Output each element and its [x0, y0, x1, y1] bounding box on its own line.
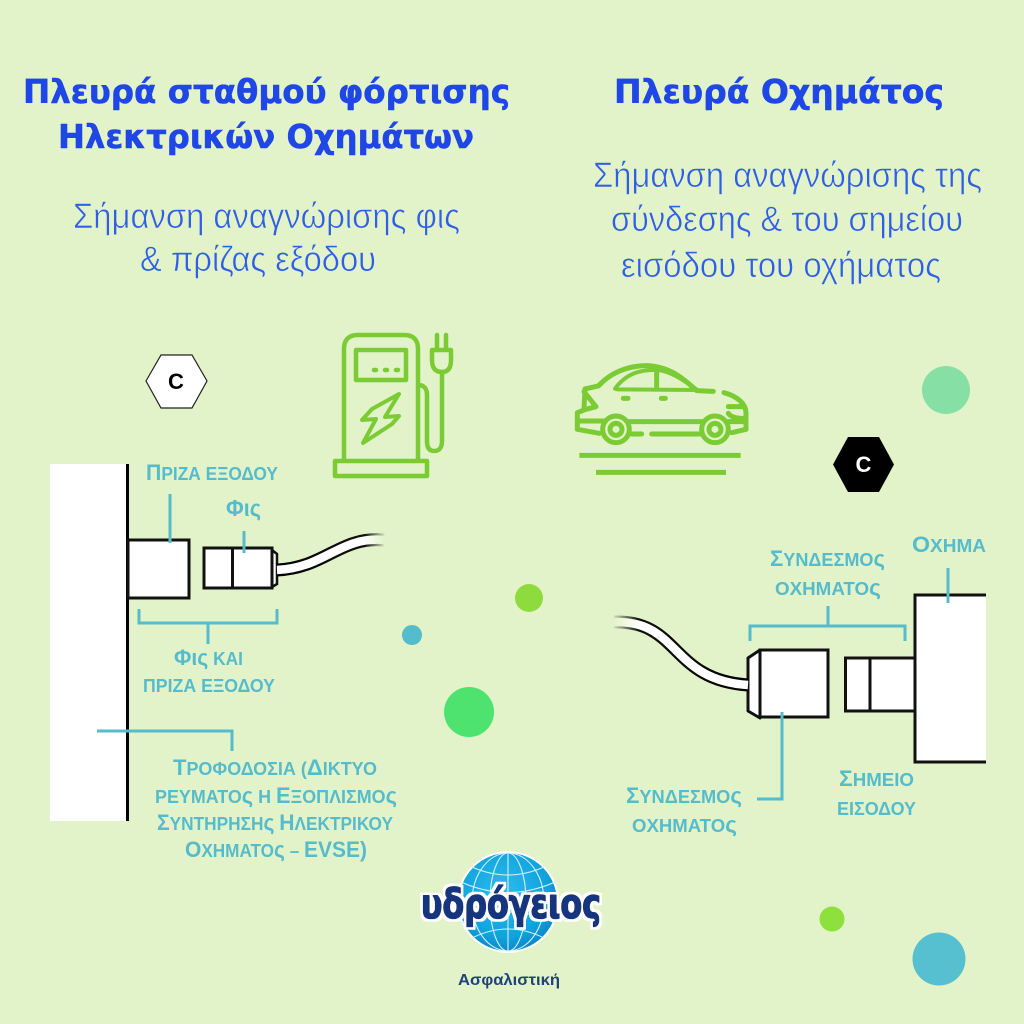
vehicle connector	[748, 650, 828, 718]
label: plug and outlet	[143, 645, 275, 696]
vehicle inlet	[846, 658, 915, 711]
socket outlet	[128, 540, 189, 598]
panel: vehicle diagram	[614, 532, 986, 837]
label: vehicle connector bottom	[626, 783, 742, 837]
label: power supply: ΡΕΥΜΑΤΟς Η ΕΞΟΠΛΙΣΜΟς	[155, 783, 397, 808]
icon: black hexagon C	[833, 437, 894, 492]
vehicle body	[915, 595, 986, 762]
icon: car	[577, 366, 746, 472]
cable	[614, 622, 748, 685]
label: power supply: ΤΡΟΦΟΔΟΣΙΑ (ΔΙΚΤΥΟ	[173, 755, 377, 780]
panel: charging station diagram	[50, 460, 397, 862]
heading: charging station side: Πλευρά σταθμού φόρτισης	[23, 72, 510, 111]
heading: vehicle side: Πλευρά Οχημάτος	[614, 72, 944, 111]
icon: charging station	[335, 335, 451, 476]
subheading: connector and vehicle inlet marking	[593, 156, 982, 285]
icon: white hexagon C: C	[168, 369, 184, 394]
globe	[458, 852, 558, 952]
label: plug and outlet: Φις ΚΑΙ	[174, 645, 243, 670]
plug	[204, 548, 277, 588]
heading: charging station side: Ηλεκτρικών Οχημάτων	[58, 117, 474, 156]
logo: Ydrogeios Insurance	[421, 852, 601, 989]
subheading: connector and vehicle inlet marking: σύνδεσης & του σημείου	[611, 200, 963, 239]
cable	[277, 540, 384, 570]
wordmark: υδρόγειος	[421, 880, 601, 928]
label: entry point: ΣΗΜΕΙΟ	[839, 766, 914, 791]
label: entry point: ΕΙΣΟΔΟΥ	[837, 799, 916, 819]
label: power supply: ΣΥΝΤΗΡΗΣΗς ΗΛΕΚΤΡΙΚΟΥ	[157, 810, 393, 835]
subheading: plug and outlet marking	[73, 197, 460, 279]
label: vehicle connector top	[770, 546, 885, 600]
label: vehicle connector top: ΣΥΝΔΕΣΜΟς	[770, 546, 885, 571]
label: vehicle connector bottom: ΟΧΗΜΑΤΟς	[632, 812, 737, 837]
subheading: connector and vehicle inlet marking: εισόδου του οχήματος	[621, 246, 941, 285]
icon: white hexagon C	[146, 355, 207, 408]
supply equipment wall	[50, 464, 129, 821]
icon: black hexagon C: C	[856, 452, 872, 477]
label: plug: Φις	[226, 495, 261, 521]
label: vehicle: ΟΧΗΜΑ	[912, 532, 986, 557]
leader lines	[97, 494, 277, 751]
subheading: plug and outlet marking: Σήμανση αναγνώρισης φις	[73, 197, 460, 236]
label: power supply: ΟΧΗΜΑΤΟς – EVSE)	[185, 837, 367, 862]
subheading: connector and vehicle inlet marking: Σήμανση αναγνώρισης της	[593, 156, 982, 195]
heading: charging station side	[23, 72, 510, 156]
subheading: plug and outlet marking: & πρίζας εξόδου	[140, 240, 376, 279]
label: plug and outlet: ΠΡΙΖΑ ΕΞΟΔΟΥ	[143, 676, 275, 696]
label: vehicle connector top: ΟΧΗΜΑΤΟς	[775, 575, 881, 600]
label: power supply	[155, 755, 397, 862]
tagline: Ασφαλιστική	[458, 972, 560, 989]
leader lines	[750, 568, 948, 799]
label: outlet: ΠΡΙΖΑ ΕΞΟΔΟΥ	[146, 460, 278, 485]
label: entry point	[837, 766, 916, 819]
decorative dots	[402, 366, 970, 986]
label: vehicle connector bottom: ΣΥΝΔΕΣΜΟς	[626, 783, 742, 808]
